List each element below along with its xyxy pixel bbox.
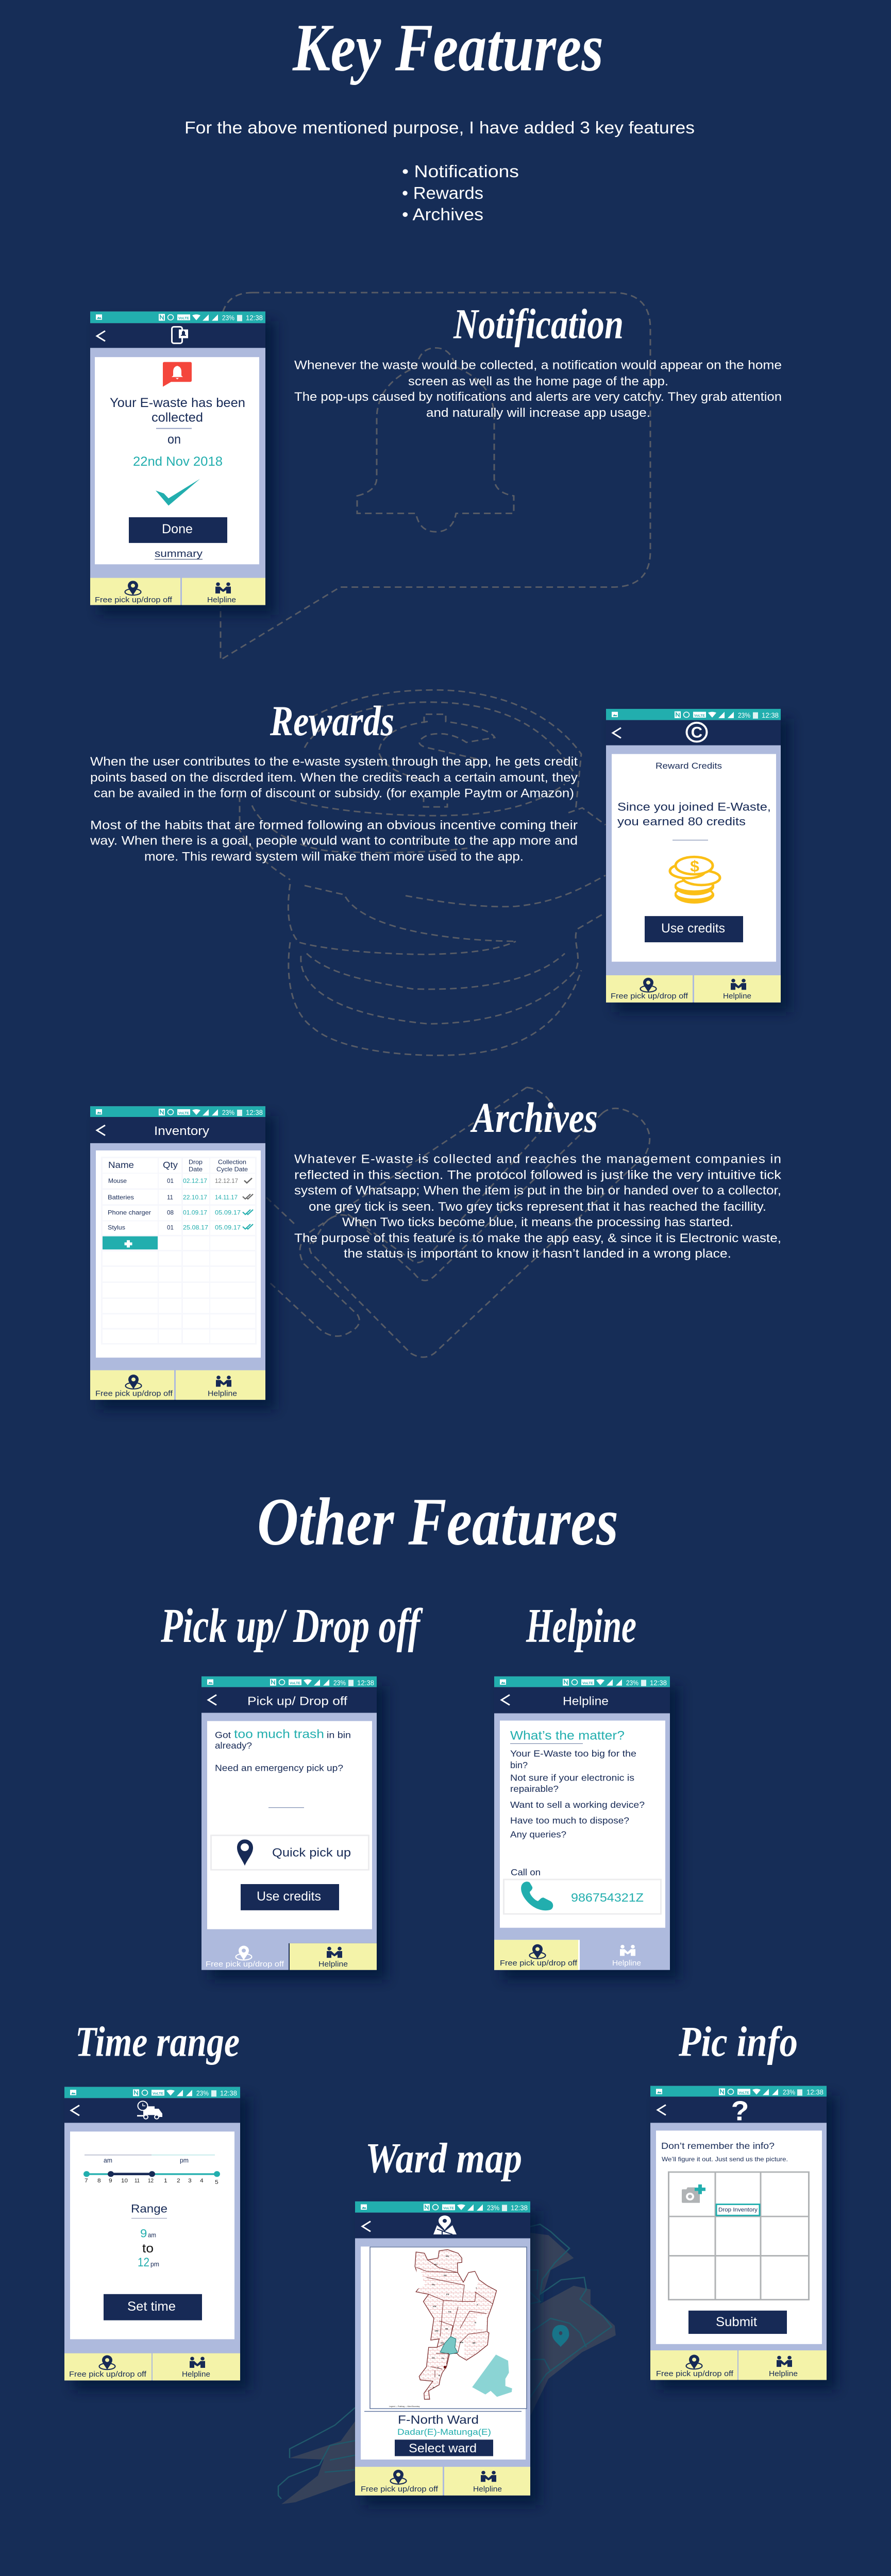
phone: pic info screen — [650, 2086, 836, 2389]
range summary: to — [142, 2241, 154, 2256]
title: Key Features: Key Features — [292, 10, 603, 86]
time slider: 2 — [177, 2178, 180, 2184]
status bar — [64, 2087, 240, 2098]
ward map: HW — [435, 2329, 439, 2332]
background: dashed notification bubble — [221, 293, 650, 660]
bullet list: • Rewards — [402, 184, 483, 203]
card questions: Call on — [511, 1867, 541, 1877]
photo grid — [668, 2172, 809, 2300]
bottom tabs: Free pick up/drop off — [95, 596, 173, 604]
message: on — [167, 432, 181, 447]
status bar: VoLTE — [178, 1112, 190, 1115]
ward map: RC — [434, 2263, 438, 2265]
status bar: 23% — [222, 314, 234, 322]
header with truck icon — [64, 2098, 240, 2123]
phone: rewards screen — [606, 709, 790, 1012]
ward map — [370, 2247, 527, 2409]
card — [656, 2130, 822, 2344]
text: rewards description: When the user contributes to the e-waste system through the app, he gets credit — [90, 755, 578, 769]
inventory table: Batteries — [108, 1194, 134, 1201]
ward map: FS — [442, 2357, 445, 2360]
heading: Ward map: Ward map — [365, 2135, 522, 2182]
call box — [504, 1879, 661, 1914]
range summary: 12 — [138, 2256, 149, 2269]
header with question mark: ? — [731, 2095, 749, 2126]
background: dashed bell — [357, 348, 514, 532]
heading: Rewards: Rewards — [270, 698, 394, 744]
ward map: Legend — Prabhag — Ward Boundary — [389, 2405, 420, 2408]
ward labels — [397, 2413, 491, 2437]
text: rewards description — [90, 755, 578, 864]
bottom tabs — [355, 2467, 530, 2496]
inventory table: 01.09.17 — [183, 1209, 207, 1216]
time slider: 4 — [200, 2178, 204, 2184]
background: dashed coin stack — [240, 690, 606, 1055]
bottom tabs — [90, 1370, 265, 1400]
header: Inventory — [154, 1124, 209, 1138]
time slider: 10 — [121, 2178, 128, 2184]
range summary — [131, 2202, 167, 2269]
text: rewards description: points based on the discrded item. When the credits reach a certain amount, they — [90, 771, 578, 785]
range summary: am — [148, 2231, 156, 2239]
message: collected — [152, 410, 203, 425]
bottom tabs — [206, 1943, 377, 1970]
time slider: pm — [180, 2157, 189, 2164]
status bar: VoLTE — [153, 2092, 164, 2096]
inventory table: 12.12.17 — [215, 1177, 238, 1184]
header with question mark — [650, 2095, 827, 2126]
status bar: 23% — [783, 2089, 795, 2097]
status bar: 12:38 — [762, 711, 779, 720]
icon: dollar sign on coin: $ — [690, 857, 699, 875]
header — [494, 1687, 670, 1713]
card questions: Any queries? — [510, 1829, 566, 1839]
photo grid: Drop Inventory — [718, 2207, 758, 2213]
bullet list: • Notifications — [402, 162, 519, 181]
time slider: 12 — [148, 2178, 154, 2184]
bottom tabs — [64, 2353, 240, 2380]
heading: Time range: Time range — [75, 2019, 240, 2065]
card questions: Want to sell a working device? — [510, 1800, 645, 1810]
inventory table: 01 — [167, 1224, 174, 1231]
heading: Notification: Notification — [453, 301, 624, 348]
bottom tabs: Helpline — [612, 1959, 641, 1968]
text: rewards description: more. This reward system will make them more used to the app. — [144, 850, 524, 864]
ward map: S — [477, 2303, 478, 2306]
ward map: HE — [445, 2328, 448, 2330]
inventory table: 05.09.17 — [215, 1209, 241, 1216]
text: archives description: When Two ticks become blue, it means the processing has started. — [342, 1215, 733, 1229]
status bar: 12:38 — [806, 2089, 823, 2097]
background: dashed paperclip — [266, 1088, 650, 1357]
ward map: PS — [446, 2293, 449, 2296]
text: archives description — [294, 1152, 781, 1261]
ward map: KE — [448, 2311, 451, 2313]
card text: too much trash — [234, 1727, 324, 1741]
header with map pin icon — [355, 2213, 530, 2239]
status bar: 12:38 — [220, 2090, 237, 2097]
phone: helpline screen — [494, 1676, 679, 1980]
inventory table: 02.12.17 — [183, 1177, 207, 1184]
icon: red bell notification — [163, 362, 192, 387]
ward map: E — [438, 2366, 439, 2369]
time slider: 7 — [85, 2178, 88, 2184]
intro sentence: For the above mentioned purpose, I have added 3 key features — [184, 118, 695, 138]
status bar: VoLTE — [178, 317, 190, 320]
status bar — [90, 1106, 265, 1117]
status bar — [90, 312, 265, 323]
time slider: am — [104, 2157, 112, 2164]
status bar: 23% — [738, 711, 750, 720]
status bar: 12:38 — [246, 1109, 263, 1117]
card text: Got — [215, 1730, 231, 1740]
status bar: 12:38 — [357, 1679, 374, 1687]
ward map: GN — [441, 2342, 444, 2344]
button: Use credits — [241, 1884, 339, 1910]
background: faint map lower tail — [278, 2408, 355, 2504]
bottom tabs: Free pick up/drop off — [95, 1389, 173, 1398]
card text: already? — [215, 1740, 252, 1751]
card text: in bin — [327, 1730, 351, 1740]
background: faint map of city — [530, 2224, 616, 2417]
ward map: GS — [432, 2357, 435, 2359]
heading: Pick up/ Drop off: Pick up/ Drop off — [160, 1599, 423, 1653]
ward map: B — [439, 2374, 440, 2377]
time slider: 11 — [135, 2178, 140, 2184]
button: Use credits: Use credits — [257, 1889, 321, 1904]
option: quick pick up: Quick pick up — [272, 1846, 351, 1859]
text: archives description: reflected in this section. The protocol followed is just like the very intuitive tick — [294, 1168, 781, 1182]
link: summary: summary — [155, 549, 203, 560]
phone: ward map screen — [355, 2201, 540, 2505]
time slider: 5 — [215, 2179, 218, 2185]
text: rewards description: way. When there is a goal, people would want to contribute to the app more and — [90, 834, 578, 848]
ward map: ME — [473, 2342, 476, 2344]
card text: Need an emergency pick up? — [215, 1762, 343, 1773]
divider — [268, 1807, 304, 1808]
title: Other Features: Other Features — [257, 1484, 618, 1560]
inventory table: Cycle Date — [216, 1166, 248, 1173]
button: Set time: Set time — [127, 2299, 176, 2314]
text: rewards description: Most of the habits that are formed following an obvious incentive coming their — [90, 818, 578, 832]
time slider — [83, 2155, 220, 2185]
inventory table: Date — [189, 1166, 203, 1173]
heading: Pic info: Pic info — [678, 2019, 798, 2065]
card questions: bin? — [510, 1759, 528, 1770]
range summary: pm — [150, 2260, 159, 2268]
button: Set time — [104, 2294, 202, 2320]
card text: Don’t remember the info? — [661, 2141, 775, 2151]
inventory table: 05.09.17 — [215, 1224, 241, 1231]
ward map: RN — [446, 2255, 449, 2257]
phone: inventory screen — [90, 1106, 275, 1410]
text: notification description: and naturally will increase app usage. — [426, 406, 650, 420]
inventory table: Mouse — [108, 1177, 127, 1184]
header — [90, 323, 265, 348]
status bar: VoLTE — [290, 1682, 301, 1685]
card text — [215, 1727, 351, 1773]
card text — [661, 2141, 788, 2163]
divider — [673, 839, 708, 841]
status bar: VoLTE — [582, 1682, 594, 1685]
bullet list — [402, 162, 519, 224]
message: Your E-waste has been — [110, 395, 245, 410]
status bar: 12:38 — [246, 314, 263, 322]
card — [207, 1721, 372, 1929]
bottom tabs: Free pick up/drop off — [206, 1960, 284, 1969]
bottom tabs: Helpline — [207, 596, 236, 604]
ward map: T — [476, 2287, 477, 2289]
status bar: 23% — [626, 1679, 638, 1687]
bottom tabs: Helpline — [473, 2485, 502, 2494]
ward labels: Dadar(E)-Matunga(E) — [397, 2427, 491, 2437]
inventory table: 14.11.17 — [215, 1194, 238, 1201]
status bar — [201, 1676, 377, 1687]
bottom tabs: Helpline — [208, 1389, 237, 1398]
bottom tabs: Free pick up/drop off — [69, 2370, 147, 2379]
status bar — [606, 709, 781, 720]
heading: Helpine: Helpine — [526, 1599, 636, 1653]
card — [96, 1150, 261, 1358]
card questions: Your E-Waste too big for the — [510, 1748, 636, 1758]
text: archives description: the status is important to know it hasn’t landed in a wrong place. — [344, 1247, 731, 1261]
icon: check mark — [156, 479, 200, 505]
status bar: VoLTE — [694, 714, 705, 718]
bottom tabs: Free pick up/drop off — [500, 1959, 578, 1968]
status bar: VoLTE — [738, 2091, 750, 2095]
bottom tabs: Helpline — [723, 992, 751, 1001]
button: Use credits: Use credits — [661, 921, 725, 936]
card text: Since you joined E-Waste, — [617, 800, 771, 814]
ward labels: F-North Ward — [398, 2413, 479, 2427]
ward map: KW — [433, 2305, 436, 2308]
status bar: 12:38 — [511, 2204, 528, 2212]
card text: you earned 80 credits — [617, 815, 746, 828]
text: archives description: system of Whatsapp; When the item is put in the bin or handed over to a collector, — [294, 1183, 781, 1198]
card questions: Not sure if your electronic is — [510, 1772, 634, 1783]
text: notification description: The pop-ups caused by notifications and alerts are very catchy. They grab attention — [294, 390, 782, 404]
header: Pick up/ Drop off — [247, 1694, 347, 1708]
text: archives description: Whatever E-waste is collected and reaches the management companies in — [294, 1152, 781, 1166]
text: notification description — [294, 358, 782, 420]
inventory table: Drop — [189, 1159, 203, 1165]
card questions: repairable? — [510, 1784, 559, 1794]
range summary: 9 — [140, 2227, 147, 2240]
heading: Archives: Archives — [470, 1094, 598, 1142]
card — [500, 1721, 665, 1928]
inventory table: 01 — [167, 1177, 174, 1184]
inventory table: 25.08.17 — [183, 1224, 208, 1231]
button: Select ward: Select ward — [409, 2442, 477, 2455]
message: 22nd Nov 2018 — [133, 454, 223, 469]
inventory table: 08 — [167, 1209, 174, 1216]
inventory table — [101, 1157, 257, 1345]
phone: time range screen — [64, 2087, 249, 2390]
status bar: 12:38 — [650, 1679, 667, 1687]
time slider: 8 — [97, 2178, 101, 2184]
bullet list: • Archives — [402, 205, 483, 224]
time slider: 1 — [164, 2178, 167, 2184]
text: rewards description: can be availed in the form of discount or subsidy. (for example Paytm or Amazon) — [94, 786, 574, 800]
button: Use credits — [645, 916, 743, 942]
card — [95, 357, 259, 564]
status bar: 23% — [487, 2204, 499, 2212]
card — [612, 754, 776, 962]
bottom tabs: Free pick up/drop off — [361, 2485, 439, 2494]
phone: pick up screen — [201, 1676, 386, 1980]
header: C — [691, 724, 702, 741]
header — [606, 720, 781, 745]
inventory table: Collection — [218, 1159, 246, 1165]
button: Submit — [688, 2311, 787, 2334]
card questions — [510, 1748, 645, 1877]
text: archives description: one grey tick is seen. Two grey ticks represent that it has reached the facillity. — [309, 1199, 766, 1214]
time slider: 9 — [109, 2178, 112, 2184]
button: Done: Done — [162, 521, 193, 536]
card heading: What’s the matter? — [510, 1728, 625, 1742]
card text — [617, 760, 771, 828]
button: Submit: Submit — [716, 2314, 758, 2329]
bottom tabs: Free pick up/drop off — [656, 2369, 734, 2378]
bottom tabs — [90, 578, 265, 605]
status bar: 23% — [222, 1109, 234, 1117]
time slider: 3 — [188, 2178, 192, 2184]
ward map: RS — [444, 2274, 447, 2277]
status bar — [650, 2086, 827, 2097]
message — [110, 395, 245, 469]
status bar — [355, 2201, 530, 2213]
bottom tabs — [650, 2350, 827, 2380]
inventory table: Stylus — [108, 1224, 125, 1231]
header — [201, 1687, 377, 1713]
option: quick pick up — [211, 1835, 369, 1870]
inventory table: Name — [108, 1159, 134, 1170]
phone: notification screen — [90, 312, 275, 615]
text: archives description: The purpose of this feature is to make the app easy, & since it is Electronic waste, — [294, 1231, 781, 1245]
inventory table: Qty — [163, 1159, 178, 1170]
status bar: 23% — [333, 1679, 346, 1687]
status bar: 23% — [196, 2090, 209, 2097]
bottom tabs — [494, 1940, 641, 1970]
button: Select ward — [395, 2439, 493, 2456]
status bar — [494, 1676, 670, 1687]
card — [361, 2247, 526, 2460]
range summary: Range — [131, 2202, 167, 2215]
text: notification description: Whenever the waste would be collected, a notification would appear on the home — [294, 358, 782, 372]
ward map: N — [475, 2321, 476, 2324]
bottom tabs: Helpline — [769, 2369, 798, 2378]
divider — [364, 2411, 522, 2412]
ward map: MW — [460, 2341, 463, 2344]
card questions: Have too much to dispose? — [510, 1815, 629, 1825]
call box: 986754321Z — [571, 1891, 644, 1905]
header — [90, 1117, 265, 1143]
inventory table: 22.10.17 — [183, 1194, 207, 1201]
card text: We’ll figure it out. Just send us the picture. — [662, 2156, 788, 2163]
button: Done — [129, 517, 227, 543]
bottom tabs: Free pick up/drop off — [611, 992, 688, 1001]
icon: gold coins — [670, 857, 720, 903]
inventory table: 11 — [167, 1194, 173, 1201]
ward map: A — [433, 2386, 434, 2388]
card — [70, 2131, 234, 2339]
inventory table: Phone charger — [108, 1209, 151, 1216]
status bar: VoLTE — [443, 2207, 455, 2210]
bottom tabs: Helpline — [182, 2370, 210, 2379]
bottom tabs: Helpline — [318, 1960, 348, 1969]
card text: Reward Credits — [655, 760, 722, 771]
header: Helpline — [563, 1694, 609, 1708]
ward map: PN — [432, 2283, 435, 2286]
bottom tabs — [606, 975, 781, 1003]
text: notification description: screen as well as the home page of the app. — [408, 374, 668, 388]
